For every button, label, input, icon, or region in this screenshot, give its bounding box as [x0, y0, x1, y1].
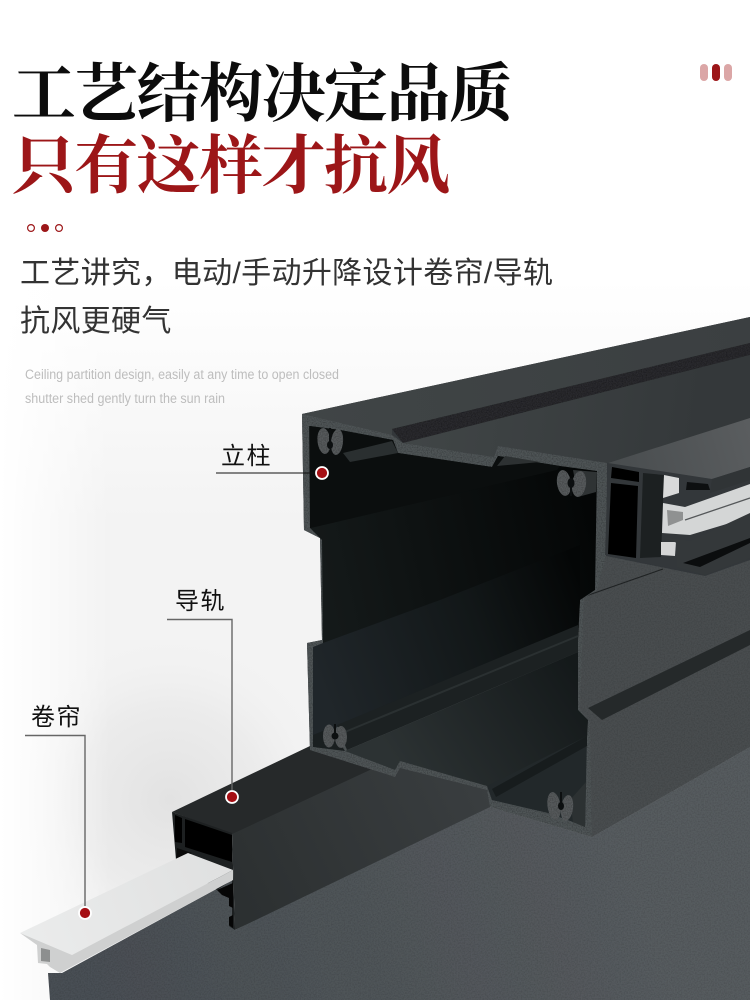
callout: roller shutter: [25, 704, 91, 919]
marker dot: [226, 791, 238, 803]
marker dot: [316, 467, 328, 479]
marker dot: [79, 907, 91, 919]
english caption: shutter shed gently turn the sun rain: [25, 391, 225, 406]
guide rail top face: [172, 746, 372, 834]
guide rail side face: [232, 740, 500, 930]
post cross-section ring: [302, 414, 607, 837]
curtain fabric: [48, 747, 750, 1000]
post side groove: [588, 630, 750, 720]
callout: column: [216, 443, 328, 479]
subheading text: [20, 257, 553, 338]
column post: [302, 317, 750, 837]
post interior upper wall: [309, 426, 597, 700]
guide rail end profile: [172, 812, 235, 930]
rail white strips: [663, 475, 679, 498]
english caption: [25, 367, 339, 406]
post claws: [316, 427, 588, 822]
post seam line: [583, 569, 663, 597]
rail top surface: [608, 418, 750, 479]
title: [12, 59, 512, 202]
post claw holes: [327, 428, 574, 810]
english caption: Ceiling partition design, easily at any time to open closed: [25, 367, 339, 382]
label 立柱: 立柱: [221, 443, 272, 470]
post interior upper shadow: [310, 426, 560, 528]
icon: three small dots: [28, 224, 62, 232]
post right face: [578, 463, 750, 837]
post interior lower wall: [313, 545, 580, 747]
title line 1: 工艺结构决定品质: [12, 59, 512, 130]
post interior floor: [345, 652, 588, 787]
label 导轨: 导轨: [175, 588, 226, 615]
guide rail: [172, 740, 500, 930]
small guide rail inside post: [605, 418, 750, 575]
label 卷帘: 卷帘: [31, 704, 82, 731]
post top face: [302, 317, 750, 436]
white bar front: [20, 870, 233, 973]
rail lower profile: [662, 513, 750, 575]
title line 2: 只有这样才抗风: [12, 131, 449, 202]
rail openings: [611, 467, 639, 482]
post backing: [302, 317, 750, 837]
rail frame: [605, 463, 749, 575]
white bar top: [20, 853, 233, 955]
roller shutter white bar: [20, 853, 233, 973]
post textured band: [392, 343, 750, 443]
icon: three pills top right: [700, 64, 732, 81]
callout: guide rail: [167, 588, 238, 803]
post inner ceiling: [403, 355, 750, 463]
post interior lower ledge: [487, 736, 587, 827]
subheading text: 工艺讲究，电动/手动升降设计卷帘/导轨: [20, 257, 553, 290]
subheading text: 抗风更硬气: [20, 305, 172, 338]
post interior ridge: [337, 625, 578, 750]
rail front lip: [710, 467, 750, 493]
